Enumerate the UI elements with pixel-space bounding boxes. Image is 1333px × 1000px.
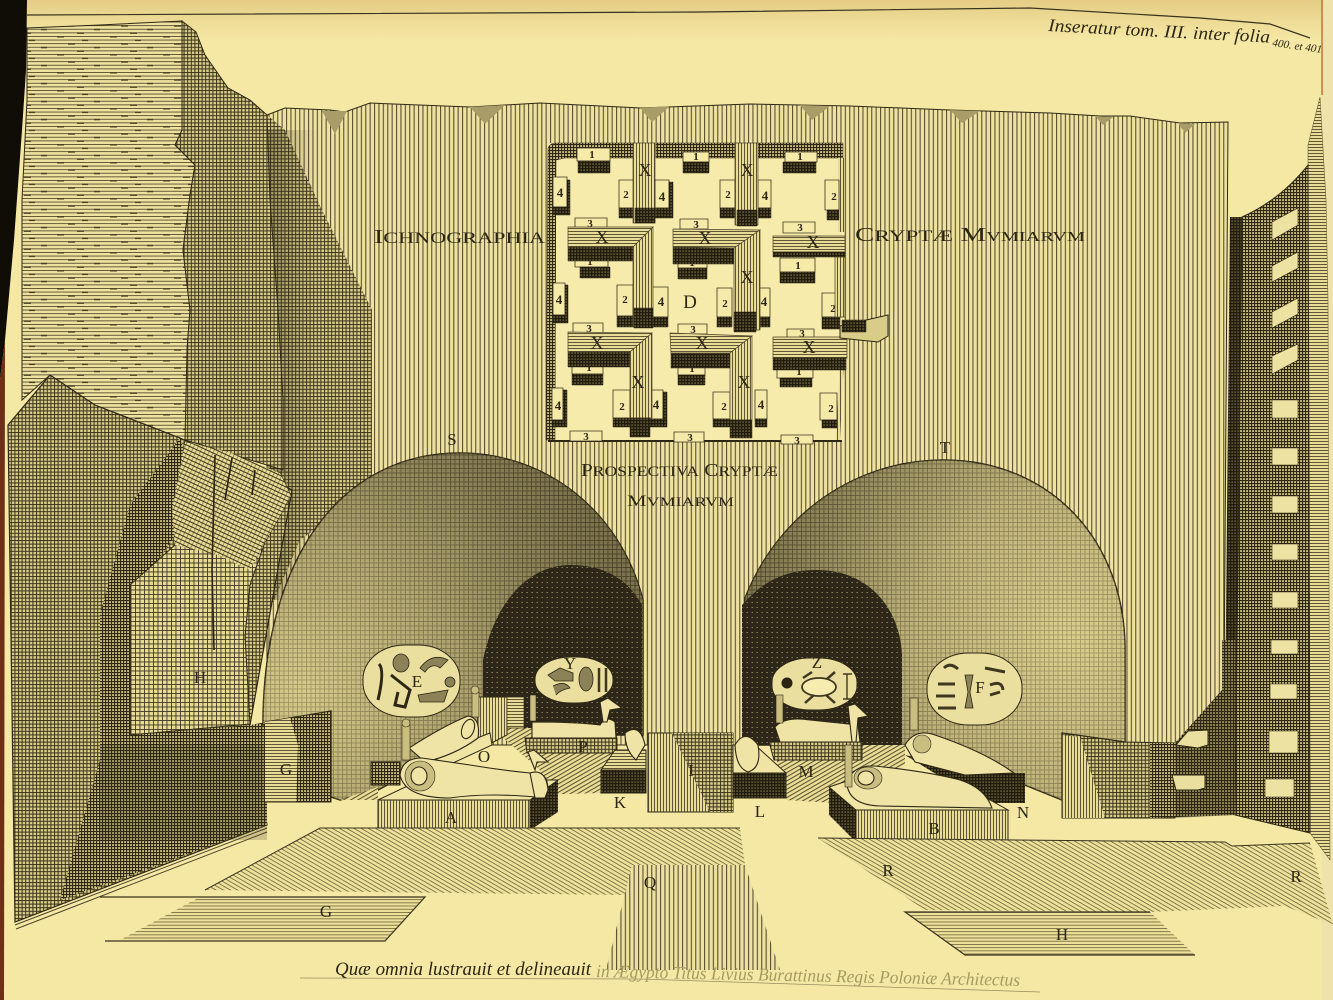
niches labelled 4: 4: [555, 398, 562, 413]
right arch vault: T: [940, 438, 951, 457]
niches labelled 3: 3: [583, 431, 589, 443]
plate border: [27, 8, 1310, 38]
lower left rock: [8, 375, 292, 929]
block G left: [265, 711, 331, 802]
wall shadow grid: [267, 115, 372, 610]
niches labelled 3: 3: [693, 219, 699, 231]
outer walls: [546, 143, 843, 440]
mummy A with platform: [378, 750, 558, 830]
X labels: X: [740, 160, 754, 180]
wall top drips: [322, 105, 1195, 134]
corridors: [568, 143, 888, 438]
niches labelled 2: 2: [722, 298, 728, 310]
X labels: X: [698, 228, 712, 248]
X labels: X: [638, 160, 652, 180]
inscription: top right: Inseratur tom. III. inter folia: [1047, 15, 1271, 47]
niches labelled 1: [572, 148, 817, 387]
central pillar: I: [688, 761, 694, 780]
engraver signature line: Quæ omnia lustrauit et delineauit: [335, 959, 592, 980]
mummy O with platform: O: [478, 747, 490, 766]
engraver signature line: in Ægypto Titus Livius Burattinus Regis Poloniæ Architectus: [596, 961, 1020, 990]
interior floors: [340, 728, 905, 803]
hieroglyph tablet Z: Z: [812, 653, 822, 672]
hieroglyph tablet F: [927, 653, 1022, 725]
heading: Ichnographia: ICHNOGRAPHIA: [374, 226, 546, 248]
mummy K with platform: K: [614, 793, 627, 812]
niches labelled 3: 3: [586, 323, 592, 335]
X labels: X: [632, 372, 644, 392]
floor slab H: H: [1056, 925, 1068, 944]
niches labelled 1: 1: [689, 363, 695, 375]
mummy L with platform: L: [755, 802, 765, 821]
mummy A with platform: A: [445, 808, 458, 827]
floor slab left with Q: [205, 828, 780, 970]
niches labelled 2: 2: [830, 303, 836, 315]
mummy B with platform: [829, 745, 1008, 842]
heading: Prospectiva Cryptae Mumiarum: M VMIARVM: [627, 493, 735, 510]
niches labelled 1: 1: [795, 260, 801, 272]
niches labelled 1: 1: [589, 149, 595, 161]
niches labelled 2: 2: [619, 401, 625, 413]
side blocks: G: [280, 760, 292, 779]
floor slab right with R: [818, 838, 1333, 925]
niches labelled 3: 3: [799, 328, 805, 340]
niches labelled 2: 2: [623, 189, 629, 201]
X labels: X: [806, 232, 820, 252]
tower windows: [1265, 208, 1298, 797]
niches labelled 2: 2: [725, 189, 731, 201]
mummy N with platform: N: [1017, 803, 1029, 822]
left arch dark chamber: [483, 565, 642, 735]
letter H: H: [194, 668, 206, 687]
niches labelled 3: 3: [687, 432, 693, 444]
floor slab right with R: R: [882, 861, 894, 880]
niches labelled 4: 4: [761, 294, 768, 309]
niches labelled 1: 1: [689, 257, 695, 269]
niches labelled 4: 4: [762, 188, 769, 203]
floor slab H: [905, 912, 1195, 955]
niches labelled 2: 2: [831, 191, 837, 203]
X labels: [590, 160, 820, 392]
niches labelled 3: 3: [797, 222, 803, 234]
side blocks: [265, 640, 1235, 818]
niches labelled 1: 1: [797, 151, 803, 163]
X labels: X: [596, 227, 608, 247]
rock outcrop: [130, 442, 291, 735]
back wall: [267, 103, 1228, 745]
niches labelled 1: 1: [693, 151, 699, 163]
niches labelled 3: 3: [794, 435, 800, 447]
mummy M with platform: [769, 695, 868, 781]
niches labelled 1: 1: [586, 362, 592, 374]
right dark column: [1224, 217, 1242, 815]
niches labelled 2: [613, 180, 842, 428]
left arch vault: [263, 430, 643, 800]
right arch dark chamber: [742, 570, 902, 745]
heading: Cryptae Mumiarum: C RYPTÆ M VMIARVM: [855, 224, 1086, 246]
niches labelled 4: 4: [653, 397, 660, 412]
niches labelled 4: 4: [556, 292, 563, 307]
dark base of rock: [60, 438, 267, 900]
hieroglyph tablet F: F: [975, 678, 985, 697]
hieroglyph tablet E: E: [412, 672, 422, 691]
niches labelled 1: 1: [796, 366, 802, 378]
niches labelled 4: 4: [658, 294, 665, 309]
niches labelled 2: 2: [828, 403, 834, 415]
heading: Prospectiva Cryptae Mumiarum: [581, 460, 778, 510]
niches labelled 3: 3: [690, 324, 696, 336]
mummy L with platform: [733, 736, 786, 821]
X labels: X: [740, 267, 754, 287]
hieroglyph tablet Z: [772, 653, 857, 710]
mummy M with platform: M: [798, 762, 814, 781]
X labels: X: [696, 333, 708, 353]
niches labelled 3: 3: [587, 218, 593, 230]
block right: [1062, 733, 1175, 818]
dark right wall base: [1150, 640, 1235, 818]
plan of crypt: [546, 143, 888, 447]
X labels: X: [802, 337, 816, 357]
right wall niches: [1172, 730, 1208, 790]
hieroglyph tablet Y: Y: [564, 654, 576, 673]
X labels: X: [590, 333, 604, 353]
niches labelled 4: 4: [758, 397, 765, 412]
niches labelled 2: 2: [721, 401, 727, 413]
X labels: X: [738, 372, 750, 392]
floor slab right with R: R: [1290, 867, 1302, 886]
mummy B with platform: B: [928, 819, 940, 838]
niches labelled 1: 1: [587, 256, 593, 268]
floor slab G: G: [320, 902, 332, 921]
hieroglyph tablet E: [363, 645, 460, 717]
mummy P with platform: [525, 695, 622, 756]
heading: Prospectiva Cryptae Mumiarum: PROSPECTIVA CRYPTÆ: [581, 460, 778, 480]
niches labelled 4: 4: [659, 189, 666, 204]
niches labelled 4: [552, 177, 771, 427]
upper left rock: [22, 21, 283, 470]
mummy K with platform: [601, 729, 646, 812]
left arch vault: S: [447, 430, 457, 449]
mummy O with platform: [371, 686, 524, 785]
label D: D: [683, 292, 697, 313]
right tower: [1235, 97, 1330, 860]
niches labelled 3: [570, 218, 815, 447]
niches labelled 2: 2: [622, 294, 628, 306]
band lines along rock foot: [15, 828, 267, 929]
niches labelled 4: 4: [557, 185, 564, 200]
right arch vault: [742, 438, 1125, 800]
mummy P with platform: P: [578, 737, 588, 756]
floor slab G: [100, 897, 425, 941]
hieroglyph tablet Y: [535, 654, 613, 703]
inscription: top right: [1047, 15, 1323, 56]
engraver signature line: [300, 959, 1040, 992]
rock crest: [175, 21, 283, 470]
inscription: top right: 400. et 401: [1272, 37, 1323, 56]
central pillar: [644, 600, 740, 812]
mummy N with platform: [905, 698, 1029, 822]
floor slab left with Q: Q: [644, 873, 656, 892]
